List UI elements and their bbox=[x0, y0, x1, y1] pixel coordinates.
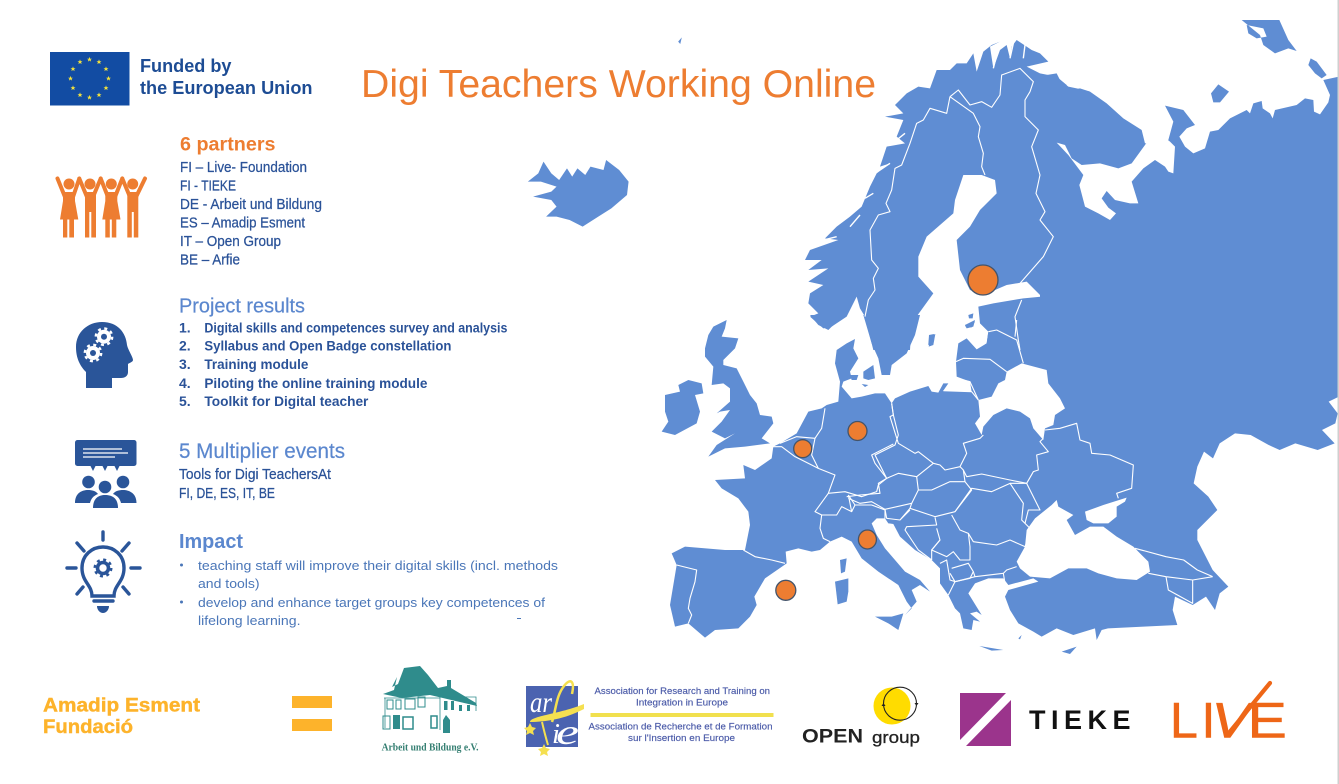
Arfie name text: Integration in Europe bbox=[636, 698, 728, 708]
Arfie name text: Association de Recherche et de Formation bbox=[588, 722, 772, 732]
title: Digi Teachers Working Online bbox=[361, 63, 876, 106]
logo row bbox=[43, 666, 1287, 756]
results list: 4. bbox=[179, 375, 191, 391]
panel: impact bbox=[67, 531, 559, 628]
icon: head with gears bbox=[76, 322, 133, 388]
icon: EU flag bbox=[50, 52, 130, 106]
panel: multiplier events bbox=[75, 440, 345, 508]
logo: Amadip Esment Fundació: Amadip Esment bbox=[43, 696, 201, 717]
logo: OPEN group: OPEN bbox=[802, 727, 863, 748]
logo: Arfie: i bbox=[552, 719, 560, 750]
marker: Spain bbox=[776, 580, 796, 600]
results list: 1. bbox=[179, 320, 191, 336]
impact bullets bbox=[180, 558, 559, 628]
heading: 5 multiplier events: 5 Multiplier events bbox=[179, 440, 345, 463]
results list: 5. bbox=[179, 393, 191, 409]
EU funding badge bbox=[50, 52, 312, 106]
results list bbox=[179, 320, 508, 409]
logo: Amadip Esment Fundació: Fundació bbox=[43, 717, 133, 738]
partner list: IT – Open Group bbox=[180, 234, 281, 250]
Arfie name text: sur l'Insertion en Europe bbox=[628, 733, 735, 743]
partner list: DE - Arbeit und Bildung bbox=[180, 197, 322, 213]
funding text: the European Union bbox=[140, 78, 312, 98]
results list: Training module bbox=[204, 356, 309, 372]
Arfie name text bbox=[588, 686, 774, 743]
heading: project results: Project results bbox=[179, 296, 305, 318]
white area: White Sea bbox=[1057, 130, 1175, 220]
results list: Syllabus and Open Badge constellation bbox=[204, 338, 451, 354]
map of Europe bbox=[528, 20, 1339, 654]
house drawing bbox=[383, 666, 477, 733]
logo: LIVE: E bbox=[1248, 692, 1287, 748]
logo: TIEKE bbox=[960, 693, 1130, 746]
funding text bbox=[140, 56, 312, 98]
impact bullets: teaching staff will improve their digital skills (incl. methods bbox=[198, 558, 559, 573]
map: country borders bbox=[677, 68, 1213, 623]
impact bullets: and tools) bbox=[198, 576, 260, 591]
heading: impact: Impact bbox=[179, 531, 243, 553]
marker: Germany bbox=[848, 422, 867, 440]
logo: Amadip Esment Fundació bbox=[43, 696, 201, 738]
logo: LIVE: V bbox=[1205, 692, 1258, 748]
Arfie name text: Association for Research and Training on bbox=[594, 686, 770, 696]
logo: Arfie: ar bbox=[530, 686, 552, 719]
map: northern Russia bbox=[1040, 20, 1339, 345]
icon: speech bubble and audience bbox=[75, 440, 136, 508]
logo: Arfie: e bbox=[556, 712, 579, 752]
map: British Isles, Iberian and Mediterranean islands bbox=[662, 315, 933, 630]
results list: Piloting the online training module bbox=[204, 375, 428, 391]
logo: TIEKE: TIEKE bbox=[1029, 705, 1130, 735]
panel: project results bbox=[76, 296, 508, 409]
partner list: ES – Amadip Esment bbox=[180, 216, 305, 232]
partner list: FI – Live- Foundation bbox=[180, 160, 307, 176]
events text bbox=[179, 467, 331, 502]
events text: Tools for Digi TeachersAt bbox=[179, 467, 331, 483]
icon: light bulb with gear bbox=[67, 532, 140, 613]
results list: 2. bbox=[179, 338, 191, 354]
logo: Arfie bbox=[524, 681, 774, 756]
panel: partners bbox=[58, 135, 322, 268]
results list: Digital skills and competences survey and analysis bbox=[204, 320, 508, 336]
partner list: BE – Arfie bbox=[180, 252, 240, 268]
logo: LIVE: I bbox=[1202, 692, 1215, 748]
Arbeit und Bildung caption: Arbeit und Bildung e.V. bbox=[382, 742, 479, 754]
logo: OPEN group: group bbox=[872, 728, 920, 747]
icon: people with raised arms bbox=[58, 178, 145, 238]
events text: FI, DE, ES, IT, BE bbox=[179, 486, 275, 502]
results list: Toolkit for Digital teacher bbox=[204, 393, 369, 409]
impact bullets: lifelong learning. bbox=[198, 613, 300, 628]
map: Iceland bbox=[528, 37, 682, 227]
heading: 6 partners: 6 partners bbox=[180, 135, 276, 156]
logo: Arbeit und Bildung bbox=[382, 666, 479, 754]
marker: Finland bbox=[968, 265, 998, 295]
partner list bbox=[180, 160, 322, 268]
logo: OPEN group bbox=[802, 687, 920, 748]
marker: Belgium bbox=[794, 440, 812, 458]
marker: Italy bbox=[858, 530, 876, 549]
white areas: Belarus, Black Sea, Azov bbox=[975, 363, 1150, 580]
icon: equals sign bbox=[292, 696, 332, 731]
map: continental Europe bbox=[670, 320, 1339, 654]
impact bullets: develop and enhance target groups key competences of bbox=[198, 595, 545, 610]
logo: LIVE bbox=[1170, 683, 1287, 748]
map: Scandinavia bbox=[805, 40, 1090, 350]
logo: LIVE: L bbox=[1170, 692, 1198, 748]
funding text: Funded by bbox=[140, 56, 232, 76]
results list: 3. bbox=[179, 356, 191, 372]
partner list: FI - TIEKE bbox=[180, 178, 236, 194]
